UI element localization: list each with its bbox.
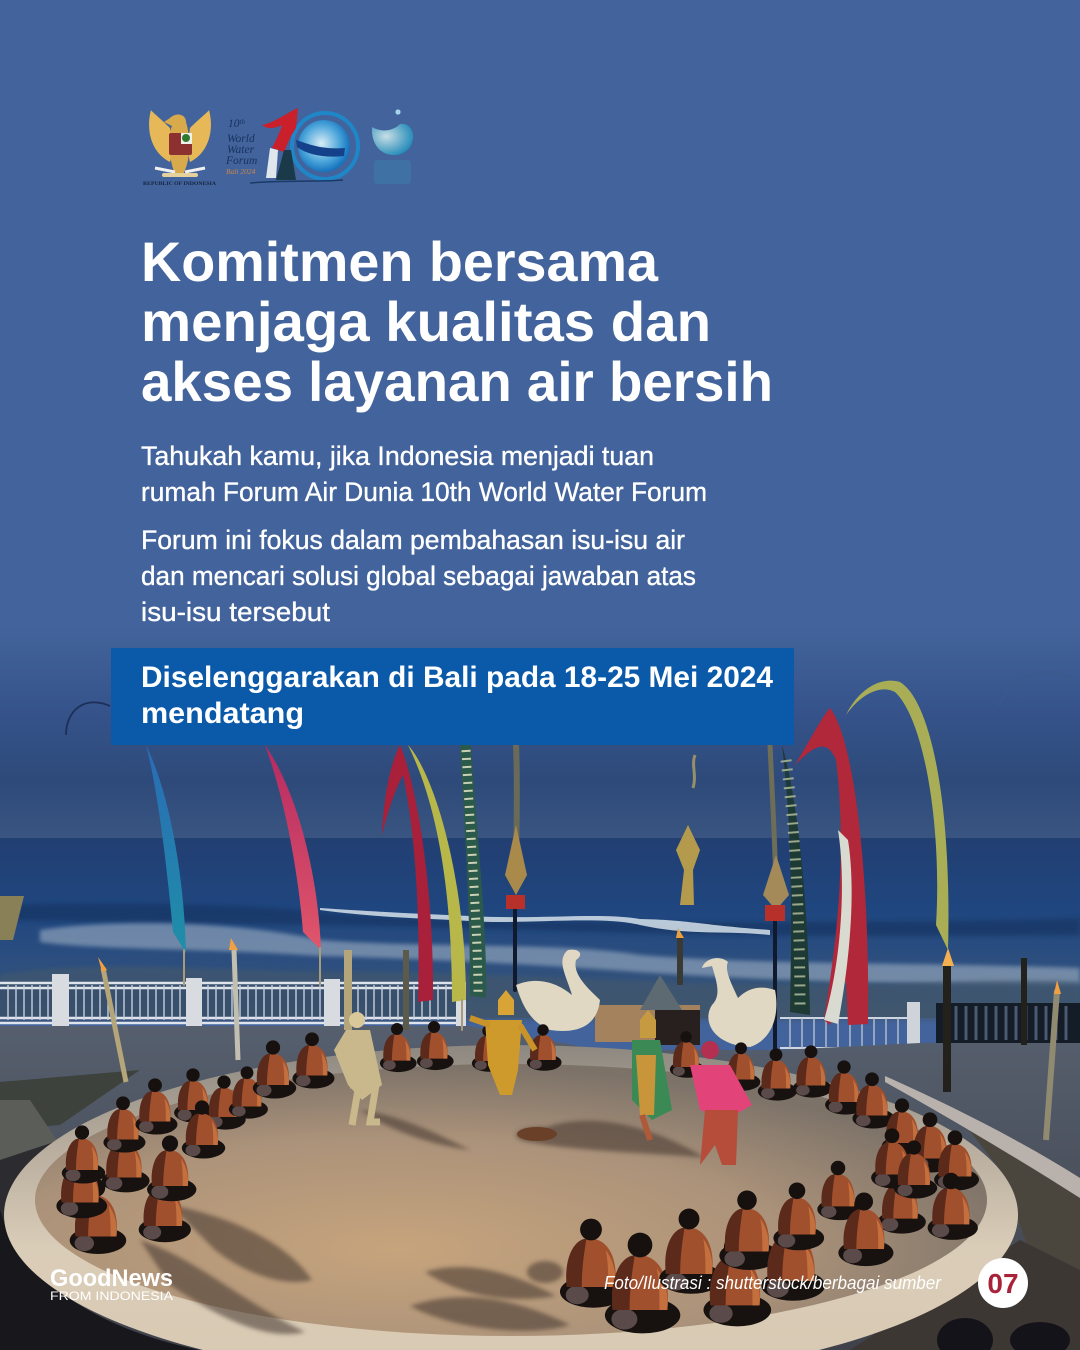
flag: checked green — [460, 745, 486, 998]
forum focus paragraph: dan mencari solusi global sebagai jawaban atas — [141, 561, 696, 591]
terrace floor — [0, 1026, 1080, 1350]
railing left — [0, 974, 466, 1029]
stone wall and pavers — [0, 1070, 1080, 1350]
circular stage rim — [4, 1045, 1018, 1350]
logo: 10th World Water Forum wordmark: Forum — [225, 155, 257, 167]
logo: water drop emblem — [372, 109, 413, 184]
callout: event date: mendatang — [141, 697, 304, 730]
brand: GoodNews from Indonesia: FROM INDONESIA — [50, 1289, 173, 1303]
title: menjaga kualitas dan — [141, 290, 711, 353]
dancer: pink — [690, 1041, 752, 1165]
logo: 10th World Water Forum wordmark: World — [227, 133, 255, 145]
title: Komitmen bersama — [141, 230, 659, 293]
flag: checked right — [782, 745, 810, 1015]
brand: GoodNews from Indonesia: GoodNews — [50, 1265, 173, 1292]
seated performers foreground — [560, 1182, 825, 1333]
logo: 10th World Water Forum wordmark: Bali 2024 — [226, 167, 256, 176]
page number badge — [978, 1258, 1028, 1308]
stage sand floor — [35, 1064, 987, 1336]
swans and shrine — [516, 950, 776, 1047]
seated performers right arc — [670, 1031, 979, 1266]
callout: event date — [111, 648, 794, 745]
flag: yellow — [408, 745, 466, 1002]
flag: red and white right — [795, 708, 868, 1025]
title: akses layanan air bersih — [141, 350, 773, 413]
flag: pink — [265, 745, 321, 950]
background: blue sky — [0, 0, 1080, 850]
logo: Garuda Pancasila — [149, 110, 211, 177]
logo: 10th World Water Forum wordmark — [225, 118, 257, 176]
sea — [0, 838, 1080, 1020]
flag: red — [382, 745, 433, 1002]
dancer: white and gold — [334, 1012, 382, 1125]
offering on stage floor — [517, 1127, 557, 1141]
logo row — [143, 108, 413, 187]
arc banner: yellow — [846, 681, 948, 950]
logo: red numeral one and globe — [250, 108, 358, 183]
thin arc right — [998, 672, 1080, 706]
intro paragraph: rumah Forum Air Dunia 10th World Water Forum — [141, 477, 707, 507]
logo: 10th World Water Forum wordmark: 10 — [228, 118, 240, 130]
railing right — [780, 1002, 1080, 1048]
forum focus paragraph — [141, 525, 696, 627]
dancer: green and gold — [632, 1010, 672, 1140]
photo: Kecak dance on a Bali cliff stage — [0, 672, 1080, 1350]
logo caption: Republic of Indonesia: REPUBLIC OF INDONESIA — [143, 181, 216, 187]
logo: 10th World Water Forum wordmark: Water — [227, 144, 255, 156]
thin arc left — [66, 702, 110, 735]
seated performers left arc — [56, 1021, 562, 1254]
stage shadows — [140, 1110, 705, 1334]
intro paragraph — [141, 441, 707, 507]
forum focus paragraph: isu-isu tersebut — [141, 597, 331, 627]
torches — [98, 928, 1061, 1140]
page number badge: 07 — [987, 1268, 1019, 1299]
photo credit: Foto/Ilustrasi : shutterstock/berbagai sumber — [604, 1273, 942, 1293]
forum focus paragraph: Forum ini fokus dalam pembahasan isu-isu air — [141, 525, 685, 555]
intro paragraph: Tahukah kamu, jika Indonesia menjadi tuan — [141, 441, 654, 471]
title — [141, 230, 773, 413]
logo: 10th World Water Forum wordmark: th — [240, 118, 245, 126]
callout: event date: Diselenggarakan di Bali pada 18-25 Mei 2024 — [141, 661, 773, 694]
flag: white strip right — [824, 830, 852, 1024]
poles — [184, 745, 776, 1050]
pole ornaments — [505, 755, 789, 921]
flag: blue — [146, 745, 186, 953]
dancer: gold — [470, 990, 535, 1095]
lantern left edge — [0, 896, 24, 940]
